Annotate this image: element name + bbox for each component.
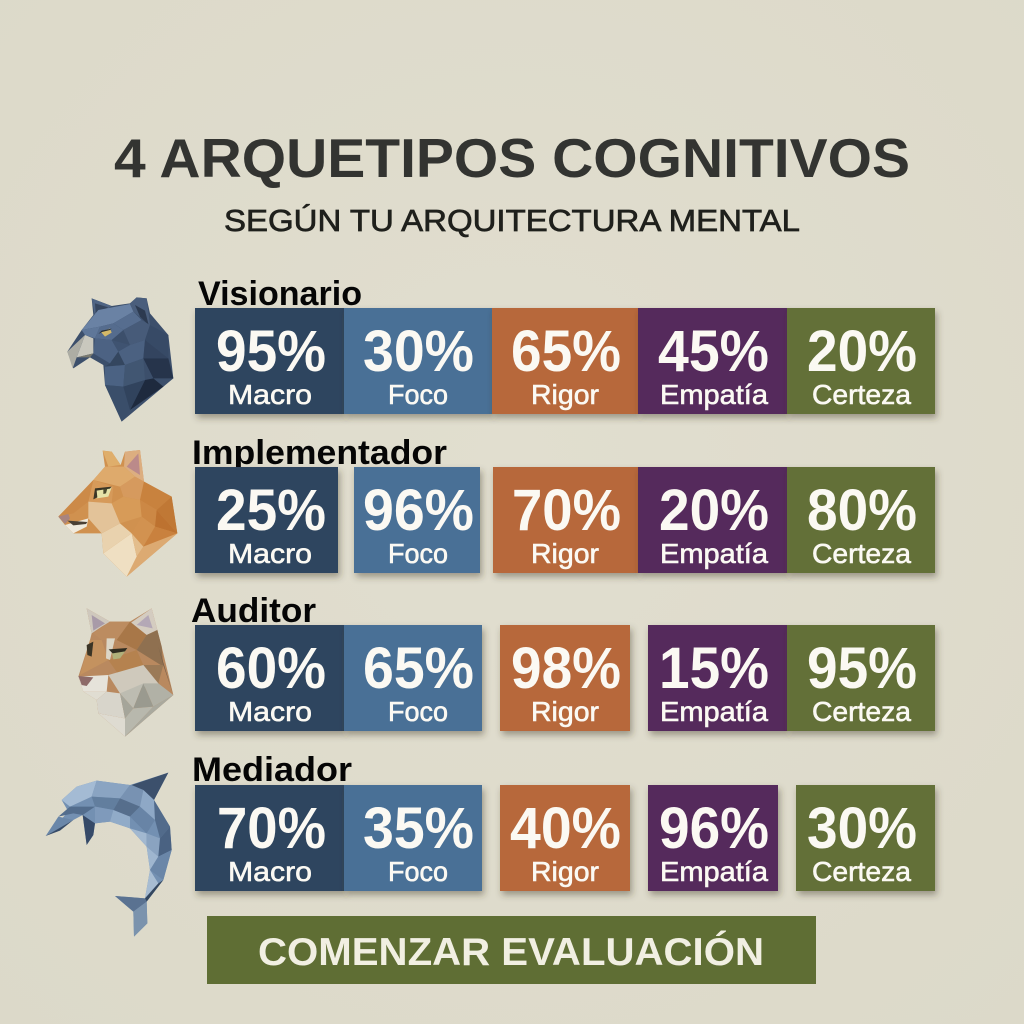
row: Implementador — [58, 434, 935, 577]
stat: 30% Foco: Foco — [388, 379, 448, 410]
icon: low-poly cougar — [78, 608, 173, 737]
stat: 65% Foco: Foco — [388, 696, 448, 727]
stat: 35% Foco — [344, 785, 482, 891]
stat: 96% Foco — [354, 467, 480, 573]
stat: 35% Foco: 35% — [363, 796, 474, 861]
stat: 95% Macro: Macro — [228, 379, 312, 410]
stat: 96% Empatía: 96% — [659, 796, 769, 861]
stat: 65% Rigor — [492, 308, 638, 414]
stat: 20% Empatía: Empatía — [660, 538, 768, 569]
stat: 80% Certeza: Certeza — [812, 538, 911, 569]
row: Auditor — [78, 592, 935, 737]
row: Visionario — [67, 275, 935, 422]
stat: 65% Rigor: 65% — [511, 319, 621, 384]
stat: 45% Empatía: Empatía — [660, 379, 768, 410]
stat: 95% Certeza — [787, 625, 935, 731]
icon: low-poly panther with beak — [67, 297, 173, 422]
icon: low-poly lioness — [58, 450, 177, 577]
stat: 30% Foco: 30% — [363, 319, 474, 384]
stat: 20% Empatía — [638, 467, 787, 573]
name: Mediador: Mediador — [192, 751, 352, 789]
button: comenzar evaluación — [207, 916, 816, 984]
stat: 96% Empatía — [648, 785, 778, 891]
stat: 30% Foco — [344, 308, 492, 414]
stat: 60% Macro: Macro — [228, 696, 312, 727]
stat: 20% Empatía: 20% — [659, 478, 769, 543]
button: comenzar evaluación: COMENZAR EVALUACIÓN — [258, 930, 764, 974]
stat: 98% Rigor — [500, 625, 630, 731]
stat: 80% Certeza — [787, 467, 935, 573]
stat: 30% Certeza: 30% — [807, 796, 917, 861]
row: Mediador — [46, 751, 935, 937]
stat: 70% Macro: Macro — [228, 856, 312, 887]
stat: 98% Rigor: 98% — [511, 636, 621, 701]
stat: 40% Rigor: Rigor — [531, 856, 599, 887]
stat: 70% Macro: 70% — [217, 796, 326, 861]
stat: 25% Macro: Macro — [228, 538, 312, 569]
stat: 70% Rigor — [493, 467, 638, 573]
stat: 60% Macro — [195, 625, 344, 731]
stat: 60% Macro: 60% — [216, 636, 326, 701]
stat: 40% Rigor — [500, 785, 630, 891]
icon: low-poly dolphin — [46, 773, 172, 937]
stat: 45% Empatía — [638, 308, 787, 414]
title: 4 ARQUETIPOS COGNITIVOS — [114, 127, 910, 189]
stat: 96% Foco: Foco — [388, 538, 448, 569]
stat: 30% Certeza — [796, 785, 935, 891]
stat: 15% Empatía: Empatía — [660, 696, 768, 727]
stat: 45% Empatía: 45% — [658, 319, 769, 384]
stat: 20% Certeza: Certeza — [812, 379, 911, 410]
stat: 40% Rigor: 40% — [510, 796, 621, 861]
stat: 95% Certeza: 95% — [807, 636, 917, 701]
name: Implementador: Implementador — [192, 434, 447, 472]
stat: 25% Macro — [195, 467, 338, 573]
stat: 20% Certeza — [787, 308, 935, 414]
stat: 80% Certeza: 80% — [807, 478, 917, 543]
stat: 65% Foco — [344, 625, 482, 731]
stat: 70% Rigor: 70% — [512, 478, 621, 543]
stat: 95% Certeza: Certeza — [812, 696, 911, 727]
stat: 35% Foco: Foco — [388, 856, 448, 887]
stat: 98% Rigor: Rigor — [531, 696, 599, 727]
stat: 95% Macro: 95% — [216, 319, 326, 384]
stat: 15% Empatía: 15% — [659, 636, 769, 701]
stat: 95% Macro — [195, 308, 344, 414]
stat: 70% Rigor: Rigor — [531, 538, 599, 569]
stat: 20% Certeza: 20% — [807, 319, 917, 384]
name: Auditor: Auditor — [191, 592, 316, 630]
stat: 96% Foco: 96% — [363, 478, 474, 543]
stat: 65% Rigor: Rigor — [531, 379, 599, 410]
stat: 30% Certeza: Certeza — [812, 856, 911, 887]
stat: 65% Foco: 65% — [363, 636, 474, 701]
stat: 70% Macro — [195, 785, 344, 891]
stat: 15% Empatía — [648, 625, 787, 731]
stat: 96% Empatía: Empatía — [660, 856, 768, 887]
subtitle: SEGÚN TU ARQUITECTURA MENTAL — [224, 203, 800, 238]
name: Visionario: Visionario — [198, 275, 362, 313]
stat: 25% Macro: 25% — [216, 478, 326, 543]
